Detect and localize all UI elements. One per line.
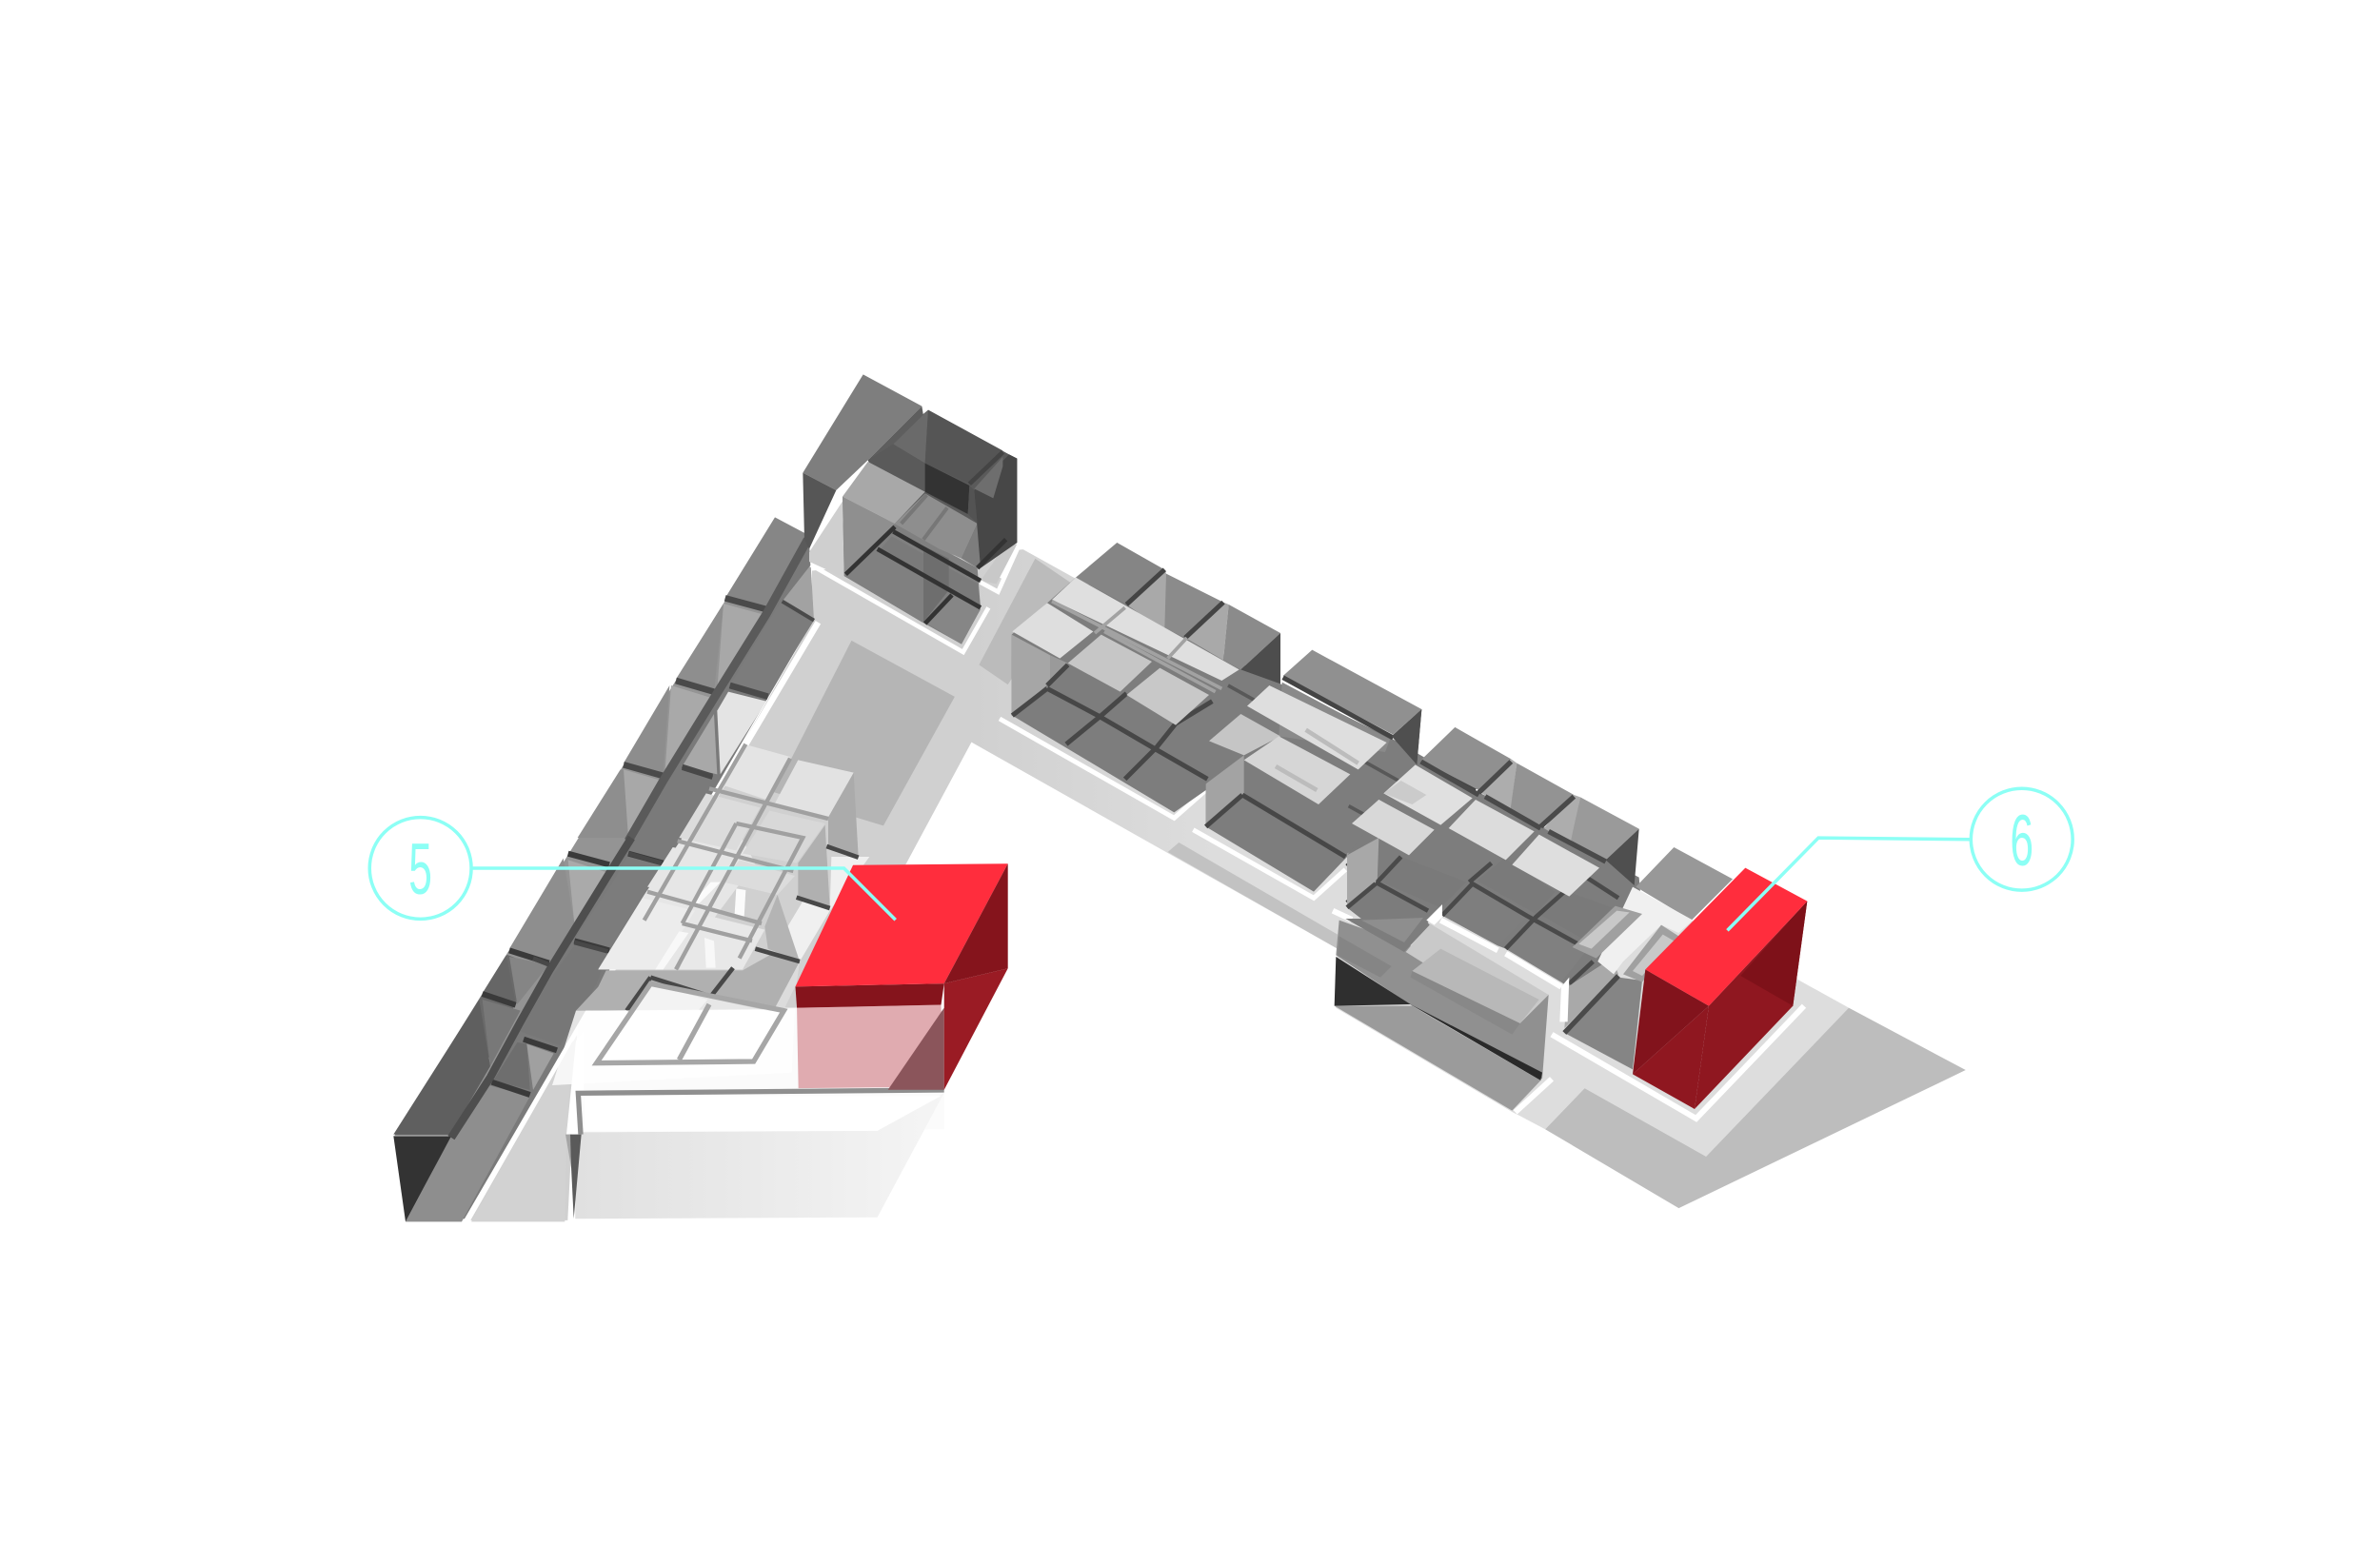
callout 6: 6 (2010, 800, 2033, 882)
north blocks (578, 517, 814, 841)
backing (1012, 578, 1476, 945)
backing (1347, 762, 1642, 987)
roof grid lines (645, 744, 828, 969)
spine (628, 540, 807, 841)
separators (624, 598, 814, 776)
footprint gaps (1333, 911, 1804, 1119)
floors (844, 549, 949, 622)
ground plane (465, 549, 1966, 1220)
glass roof (843, 462, 925, 524)
tops (1076, 543, 1476, 787)
white corner panel (1597, 887, 1693, 974)
block tops (578, 517, 807, 838)
top corner block (803, 374, 1019, 652)
ground shadow tip (1545, 1008, 1966, 1208)
red block right (1633, 868, 1807, 1109)
south blocks (393, 838, 944, 1221)
wing backing (395, 519, 814, 1219)
tops (1392, 709, 1733, 921)
callout 6 (1727, 788, 2073, 930)
floor lines (1347, 857, 1618, 983)
dark sill lines (533, 768, 859, 1011)
court veil (552, 1009, 795, 1085)
lower standing block (1335, 918, 1549, 1111)
separators (483, 854, 664, 1095)
top lines (1421, 762, 1606, 862)
glass bay (533, 744, 869, 1085)
walls (1012, 635, 1390, 907)
left wing row of blocks (393, 517, 944, 1221)
footprint outline (811, 545, 1019, 652)
wall (1347, 838, 1378, 906)
plaza pieces (809, 502, 844, 578)
ground wedge (471, 1041, 573, 1221)
inner faces (628, 565, 814, 841)
glass panels (1012, 578, 1469, 855)
window frame (597, 983, 783, 1063)
end block floor (1564, 978, 1642, 1069)
courtyard fading lower area (575, 1008, 944, 1219)
top lines (1126, 569, 1476, 790)
red block left (795, 863, 1008, 1090)
right wing east blocks (1333, 709, 1804, 1119)
plaza shadow (979, 559, 1073, 684)
callout 5 (369, 818, 896, 920)
glass panels (1352, 764, 1599, 897)
inner faces (406, 855, 664, 1221)
column walls (576, 773, 869, 1011)
right wing west blocks (1012, 543, 1476, 945)
dark wedge (1335, 957, 1411, 1006)
backing (868, 410, 1017, 568)
ground details right wing (1000, 549, 1345, 949)
floor lines (1012, 664, 1476, 911)
dark corner (393, 1136, 451, 1221)
callout 5: 5 (408, 829, 432, 910)
top faces (803, 374, 922, 490)
glass walls (843, 497, 895, 574)
footprint outlines (1000, 549, 1345, 898)
block tops (393, 859, 607, 1135)
courtyard slab (774, 641, 955, 825)
floors (1347, 857, 1612, 982)
spine lines (1228, 685, 1476, 876)
block lines (845, 452, 1006, 624)
dark slit (569, 1135, 582, 1219)
roof panels (598, 744, 854, 969)
spine (451, 838, 631, 1138)
glass mullions (902, 495, 947, 540)
glass panel lines (1052, 602, 1359, 790)
white footprint outlines (465, 623, 818, 1219)
court frame (566, 1031, 584, 1135)
